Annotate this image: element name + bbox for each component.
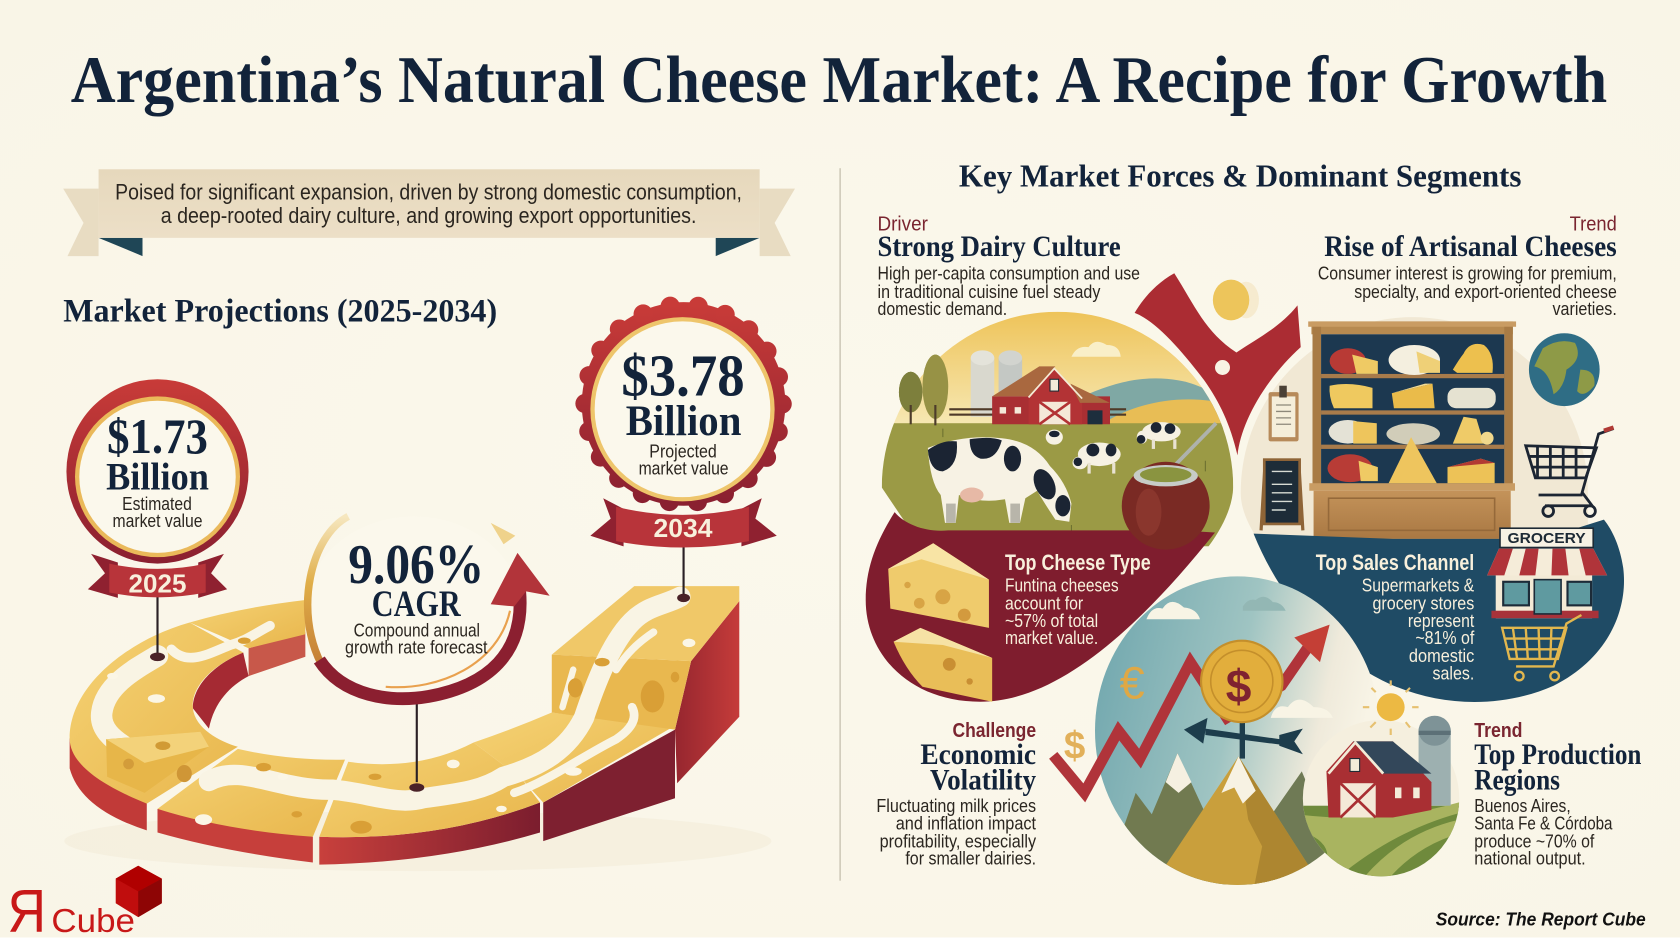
- banner: [63, 169, 795, 256]
- coin: [1201, 641, 1282, 722]
- badge text: Projected: [649, 442, 717, 462]
- sky: [879, 311, 1238, 429]
- right block wall: [675, 601, 739, 783]
- mate gourd: [1122, 423, 1216, 550]
- text block: challenge: profitability, especially: [880, 831, 1037, 852]
- trees: [899, 355, 948, 425]
- badge text: $1.73: [107, 409, 208, 464]
- text block: driver: in traditional cuisine fuel steady: [878, 281, 1101, 302]
- text block: artisanal trend: specialty, and export-oriented cheese: [1354, 281, 1617, 302]
- panel: economic volatility scene: [1053, 573, 1382, 889]
- text block: artisanal trend: [1318, 213, 1617, 319]
- text block: driver: Driver: [878, 213, 928, 235]
- panel: cheese shop background circle: [1241, 317, 1588, 541]
- barn: [1326, 741, 1431, 818]
- weather vane: [1184, 718, 1303, 759]
- silo: [1419, 716, 1451, 806]
- ribbon: 2034: [590, 498, 777, 548]
- badge: 2034 value: [582, 302, 785, 548]
- text block: production regions: [1474, 720, 1642, 869]
- badge text: $3.78: [621, 342, 745, 408]
- heading: key market forces: Key Market Forces & Dominant Segments: [959, 157, 1521, 193]
- cagr text: 9.06%: [348, 534, 484, 596]
- shopping cart: [1526, 429, 1614, 516]
- right block front: [552, 655, 691, 730]
- segment 2 wall: [158, 809, 313, 862]
- text block: challenge: Fluctuating milk prices: [876, 795, 1036, 816]
- sun: [1363, 680, 1419, 735]
- back inner walls: [193, 632, 305, 729]
- title: Argentina’s Natural Cheese Market: A Recipe for Growth: [71, 44, 1607, 117]
- text block: challenge: and inflation impact: [896, 812, 1037, 833]
- cagr text: Compound annual: [354, 620, 480, 640]
- scalloped ring: [582, 302, 785, 506]
- cheese type text: [1005, 550, 1151, 648]
- barn scene sky: [1302, 720, 1459, 852]
- text block: driver: [878, 213, 1140, 319]
- pin: cagr: [409, 696, 424, 792]
- text block: artisanal trend: Trend: [1570, 213, 1617, 235]
- panel: production region scene: [1302, 680, 1460, 876]
- text block: driver: Strong Dairy Culture: [878, 230, 1121, 263]
- sun: [1233, 282, 1259, 318]
- cheese wedge 1: [888, 543, 989, 628]
- bottom white strip: [0, 938, 1680, 945]
- badge text: [106, 409, 209, 531]
- sales channel text: [1316, 550, 1475, 683]
- silos: [971, 350, 1022, 417]
- cheese holes: [238, 638, 679, 834]
- sales channel text: Top Sales Channel: [1316, 550, 1474, 575]
- text block: artisanal trend: Consumer interest is growing for premium,: [1318, 263, 1617, 284]
- fields: [1303, 802, 1460, 876]
- banner body: [99, 169, 760, 238]
- zigzag arrow: [1053, 625, 1330, 793]
- sales channel text: domestic: [1409, 645, 1474, 666]
- panel: top cheese type: [866, 512, 1215, 702]
- fence: [949, 408, 1126, 416]
- sales channel text: Supermarkets &: [1362, 574, 1475, 595]
- arrow head: [491, 553, 550, 606]
- ribbon: 2025: 2025: [129, 571, 186, 599]
- panel: farm scene: [879, 311, 1238, 552]
- logo text: Cube: [51, 903, 135, 940]
- clipboard: [1269, 386, 1299, 441]
- banner text: Poised for significant expansion, driven by strong domestic consumption,: [115, 179, 742, 204]
- text block: driver: High per-capita consumption and use: [878, 263, 1140, 284]
- segment 3 top: [319, 742, 540, 837]
- small cows: [1046, 422, 1181, 474]
- ribbon: 2025: [88, 554, 227, 599]
- pin: 2034: [677, 541, 690, 602]
- back segment: [190, 600, 305, 648]
- counter: [1309, 483, 1515, 491]
- cheeses on shelves: [1328, 344, 1496, 483]
- badge: 2025 value: [66, 379, 249, 599]
- heading: market projections: Market Projections (2025-2034): [63, 292, 497, 329]
- cagr disc: [306, 516, 521, 699]
- milk stream: [102, 597, 680, 801]
- dollar symbol: $: [1064, 725, 1085, 768]
- text block: production regions: national output.: [1474, 848, 1586, 869]
- left segment top: [70, 622, 243, 804]
- badge text: Billion: [106, 455, 209, 499]
- text block: challenge: Economic: [920, 738, 1036, 771]
- shelf cabinet: [1308, 321, 1516, 539]
- grass tufts: [943, 429, 1205, 534]
- big cow: [928, 437, 1071, 523]
- trees in front: [899, 355, 948, 425]
- back mountains: [1124, 754, 1325, 885]
- panel: top sales channel: [1254, 520, 1624, 702]
- pin: 2025: [150, 595, 165, 661]
- cagr text: [345, 534, 488, 658]
- segment 4 top: [474, 712, 672, 802]
- banner tails: [63, 189, 795, 256]
- clouds: [1146, 602, 1333, 718]
- cheese type text: market value.: [1005, 627, 1098, 648]
- text block: driver: domestic demand.: [878, 298, 1007, 319]
- badge text: market value: [112, 511, 202, 531]
- logo cube: [116, 866, 162, 917]
- red arc: [319, 591, 520, 699]
- barn: [992, 366, 1110, 424]
- store: [1491, 573, 1599, 618]
- panel: cheese shop: [1261, 321, 1614, 539]
- blue blob: [1254, 520, 1624, 702]
- cagr text: growth rate forecast: [345, 638, 488, 658]
- cheese type text: account for: [1005, 593, 1083, 614]
- badge text: Estimated: [122, 494, 192, 514]
- text block: production regions: produce ~70% of: [1474, 831, 1595, 852]
- sky: [1093, 573, 1382, 889]
- inner disc: [590, 317, 775, 501]
- coin: $: [1226, 660, 1251, 712]
- sales channel text: sales.: [1432, 662, 1474, 683]
- euro symbol: €: [1120, 658, 1145, 709]
- segment 2 top: [158, 749, 345, 837]
- badge text: market value: [639, 459, 729, 479]
- source note: Source: The Report Cube: [1436, 910, 1646, 930]
- cheese type text: Top Cheese Type: [1005, 550, 1151, 575]
- sales channel text: grocery stores: [1372, 593, 1474, 614]
- banner text: a deep-rooted dairy culture, and growing export opportunities.: [161, 203, 696, 228]
- swoosh: [1135, 273, 1301, 455]
- logo text: [8, 878, 135, 945]
- badge ring: [66, 379, 249, 564]
- left segment wall: [70, 738, 147, 830]
- cheese wedge 2: [894, 628, 992, 702]
- cheese wedge on ring: [106, 732, 209, 793]
- text block: challenge: for smaller dairies.: [905, 848, 1036, 869]
- gold flick: [491, 523, 515, 544]
- cheese ring chart: [64, 586, 771, 871]
- badge text: [621, 342, 745, 479]
- chalkboard: [1261, 459, 1303, 530]
- text block: production regions: Trend: [1474, 720, 1522, 742]
- text block: challenge: Challenge: [952, 720, 1036, 742]
- ring shadow: [64, 811, 771, 871]
- cloud: [1071, 342, 1121, 357]
- segment 4 wall: [543, 730, 675, 841]
- sales channel text: ~81% of: [1415, 627, 1475, 648]
- badge inner: [79, 401, 236, 553]
- text block: challenge: Volatility: [930, 764, 1036, 797]
- cheese type text: ~57% of total: [1005, 610, 1098, 631]
- badge text: Billion: [626, 398, 742, 445]
- text block: production regions: Santa Fe & Córdoba: [1474, 812, 1613, 833]
- text block: artisanal trend: varieties.: [1552, 298, 1617, 319]
- cheese type text: Funtina cheeses: [1005, 574, 1119, 595]
- logo text: Я: [8, 878, 46, 945]
- right block top: [552, 586, 739, 661]
- sales channel text: represent: [1408, 610, 1475, 631]
- text block: challenge: [876, 720, 1037, 869]
- red swoosh and sun: [1135, 273, 1301, 455]
- globe: [1529, 333, 1600, 406]
- yellow cart: [1502, 615, 1581, 680]
- banner fold triangles: [99, 238, 760, 256]
- grass: [879, 423, 1238, 552]
- center divider: [839, 168, 841, 881]
- hills: [1090, 378, 1223, 428]
- ribbon: 2034: 2034: [654, 515, 713, 543]
- grocery sign: GROCERY: [1508, 530, 1586, 547]
- segment 3 wall: [319, 802, 540, 865]
- cagr ring: [306, 516, 550, 699]
- text block: artisanal trend: Rise of Artisanal Cheeses: [1324, 230, 1617, 263]
- cagr text: CAGR: [372, 584, 461, 625]
- text block: production regions: Buenos Aires,: [1474, 795, 1571, 816]
- red blob: [866, 512, 1215, 702]
- main mountain: [1162, 756, 1311, 889]
- text block: production regions: Regions: [1474, 764, 1560, 797]
- text block: production regions: Top Production: [1474, 738, 1642, 771]
- banner text: [115, 179, 742, 228]
- awning: [1487, 549, 1607, 575]
- gold arc: [308, 516, 348, 664]
- logo: RCube: [8, 866, 162, 945]
